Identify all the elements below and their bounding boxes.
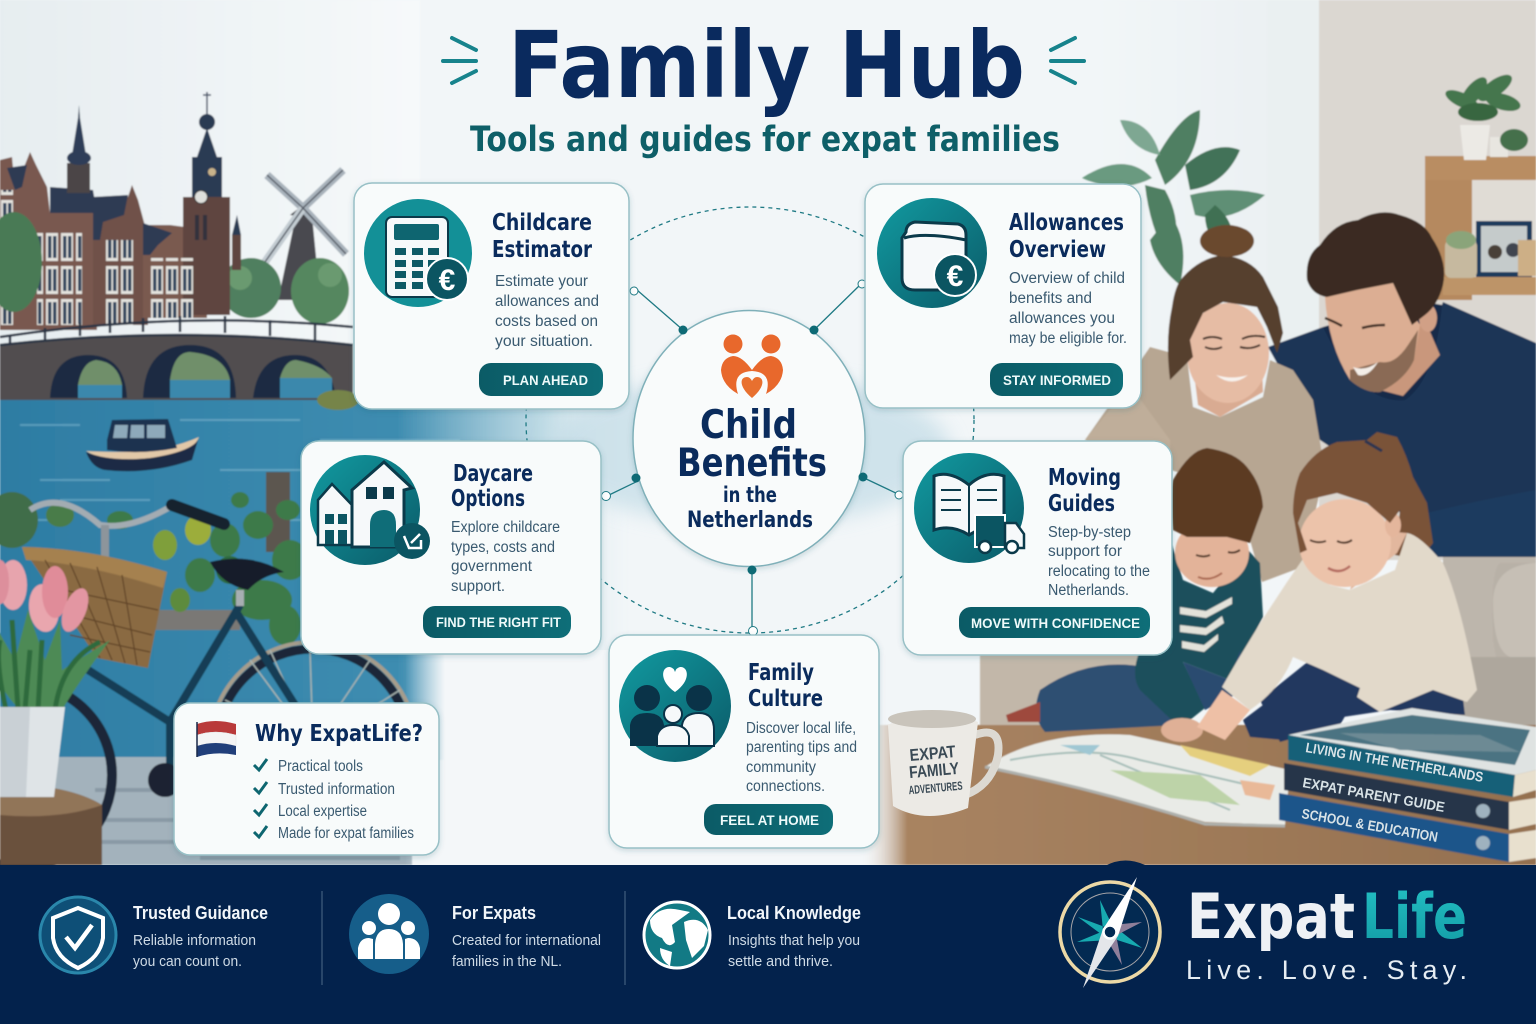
- body text: Netherlands.: [1048, 582, 1129, 599]
- icon: shield: [40, 897, 116, 973]
- houseplant: [1082, 110, 1265, 285]
- panel: daycare options: [301, 441, 601, 654]
- subtitle: Tools and guides for expat families: [470, 120, 1060, 160]
- button: FEEL AT HOME: [720, 812, 819, 828]
- mug: ADVENTURES: [908, 779, 963, 797]
- local knowledge: settle and thrive.: [728, 953, 833, 970]
- connector ring: [526, 207, 974, 636]
- boy: [1006, 448, 1263, 742]
- body text: [495, 273, 599, 350]
- heading: [1009, 210, 1124, 263]
- open map book: [985, 734, 1290, 826]
- boat: [86, 419, 199, 471]
- heading: Family: [748, 660, 814, 686]
- connector dots: [632, 326, 868, 574]
- button: PLAN AHEAD: [503, 372, 588, 388]
- scene: living room: [860, 0, 1536, 865]
- mug: FAMILY: [908, 759, 960, 782]
- local knowledge: Insights that help you: [728, 932, 860, 949]
- boardwalk: [0, 757, 412, 865]
- icon: family with heart: [619, 650, 731, 762]
- panel: why expatlife: [174, 703, 439, 855]
- checklist: Made for expat families: [278, 825, 414, 842]
- logo: expatlife compass: Life: [1362, 880, 1467, 953]
- heading: Options: [451, 486, 525, 512]
- for expats: Created for international: [452, 932, 601, 949]
- body text: costs based on: [495, 313, 598, 330]
- trusted guidance: Reliable information: [133, 932, 256, 949]
- heading: Guides: [1048, 491, 1115, 517]
- footer band: [0, 860, 1536, 1024]
- wooden table: [860, 725, 1536, 865]
- waves: [20, 420, 460, 520]
- body text: Estimate your: [495, 273, 588, 290]
- logo: expatlife compass: Live. Love. Stay.: [1186, 955, 1467, 985]
- icon: compass: [1060, 877, 1160, 988]
- girl: [1197, 432, 1477, 742]
- for expats: For Expats: [452, 903, 536, 923]
- logo: expatlife compass: [1060, 877, 1467, 988]
- body text: [746, 720, 857, 795]
- button: FIND THE RIGHT FIT: [436, 614, 561, 630]
- body text: Step-by-step: [1048, 524, 1131, 541]
- heading: [451, 461, 533, 512]
- flower pot: [0, 707, 65, 797]
- local knowledge: [644, 902, 861, 970]
- icon: calculator: [364, 199, 472, 307]
- heading: [1048, 465, 1121, 517]
- checklist: Practical tools: [278, 758, 363, 775]
- body text: support.: [451, 578, 505, 595]
- panel: childcare estimator: [354, 183, 629, 409]
- body text: types, costs and: [451, 539, 555, 556]
- trusted guidance: [40, 897, 268, 973]
- body text: parenting tips and: [746, 739, 857, 756]
- body text: allowances and: [495, 293, 599, 310]
- icon: wallet: [877, 198, 987, 308]
- icon: houses: [310, 455, 430, 565]
- left tree: [0, 212, 42, 312]
- body text: your situation.: [495, 333, 593, 350]
- icon: calculator: €: [439, 264, 456, 297]
- icon: book and truck: [914, 453, 1024, 563]
- panel: allowances overview: [865, 184, 1141, 408]
- heading: [748, 660, 823, 712]
- icon: globe: [644, 902, 710, 968]
- book titles: EXPAT PARENT GUIDE: [1301, 774, 1446, 815]
- panel: moving guides: [903, 441, 1172, 655]
- checklist: [254, 758, 414, 842]
- scene: Dutch canal city: [0, 0, 640, 867]
- hub label: [677, 403, 827, 533]
- body text: [1048, 524, 1150, 599]
- wooden shelf: [1425, 156, 1536, 300]
- centre watercolour wash: [550, 375, 950, 525]
- railing post and rail: [155, 610, 240, 630]
- body text: benefits and: [1009, 290, 1092, 307]
- body text: connections.: [746, 778, 825, 795]
- body text: community: [746, 759, 816, 776]
- heading: Moving: [1048, 465, 1121, 491]
- panel: centre hub: [632, 310, 868, 574]
- heading: Childcare: [492, 210, 592, 236]
- bicycle: [0, 503, 416, 867]
- mug: [888, 710, 999, 816]
- wicker basket: [22, 547, 167, 668]
- button: [959, 607, 1150, 638]
- sofa and floor wall: [980, 553, 1536, 730]
- body text: Explore childcare: [451, 519, 560, 536]
- trusted guidance: Trusted Guidance: [133, 903, 268, 923]
- book titles: LIVING IN THE NETHERLANDS: [1304, 739, 1485, 785]
- body text: may be eligible for.: [1009, 330, 1127, 347]
- button: MOVE WITH CONFIDENCE: [971, 615, 1140, 631]
- for expats: families in the NL.: [452, 953, 562, 970]
- hub label: in the: [723, 483, 777, 507]
- checklist: Local expertise: [278, 803, 367, 820]
- canal water: [0, 395, 640, 760]
- button: [704, 804, 833, 835]
- icon: dutch flag: [197, 721, 236, 757]
- title: Family Hub: [508, 12, 1025, 119]
- tulip bouquet: [0, 560, 110, 710]
- hub label: Benefits: [677, 441, 827, 486]
- heading: Culture: [748, 686, 823, 712]
- climbing leaves: [0, 492, 308, 645]
- hub label: Child: [700, 403, 797, 448]
- book titles: [1300, 739, 1485, 845]
- heading: Overview: [1009, 237, 1106, 263]
- book titles: SCHOOL & EDUCATION: [1300, 805, 1439, 845]
- body text: [451, 519, 560, 595]
- checklist: Trusted information: [278, 781, 395, 798]
- icon: wallet: €: [947, 260, 964, 293]
- canal houses: [0, 92, 241, 330]
- logo: expatlife compass: Expat: [1187, 880, 1355, 953]
- fade of scene into page: [405, 650, 885, 865]
- book stack: [1279, 708, 1536, 862]
- button: [423, 606, 571, 638]
- body text: Overview of child: [1009, 270, 1125, 287]
- heading: [492, 210, 593, 263]
- title accents: [443, 38, 1084, 83]
- wooden stump: [0, 783, 102, 865]
- heading: Daycare: [453, 461, 533, 487]
- local knowledge: Local Knowledge: [727, 903, 861, 923]
- stone bridge: [0, 316, 359, 410]
- heading: Why ExpatLife?: [255, 721, 423, 747]
- mother: [1085, 225, 1323, 582]
- body text: Discover local life,: [746, 720, 856, 737]
- heading: Allowances: [1009, 210, 1124, 236]
- potted plant on top shelf: [1443, 70, 1528, 160]
- button: [990, 363, 1123, 396]
- button: STAY INFORMED: [1003, 372, 1111, 388]
- father: [1268, 212, 1536, 557]
- heading: Estimator: [492, 237, 593, 263]
- body text: government: [451, 558, 533, 575]
- button: [479, 363, 603, 396]
- for expats: [349, 894, 601, 974]
- trusted guidance: you can count on.: [133, 953, 242, 970]
- icon: family heart: [721, 334, 783, 398]
- body text: allowances you: [1009, 310, 1115, 327]
- body text: [1009, 270, 1127, 347]
- trees behind bridge: [221, 258, 349, 324]
- panel: family culture: [609, 635, 879, 848]
- body text: support for: [1048, 543, 1122, 560]
- hub label: Netherlands: [687, 508, 813, 533]
- windmill: [265, 170, 346, 300]
- mug: EXPAT: [909, 742, 957, 765]
- icon: people: [349, 894, 429, 974]
- body text: relocating to the: [1048, 563, 1150, 580]
